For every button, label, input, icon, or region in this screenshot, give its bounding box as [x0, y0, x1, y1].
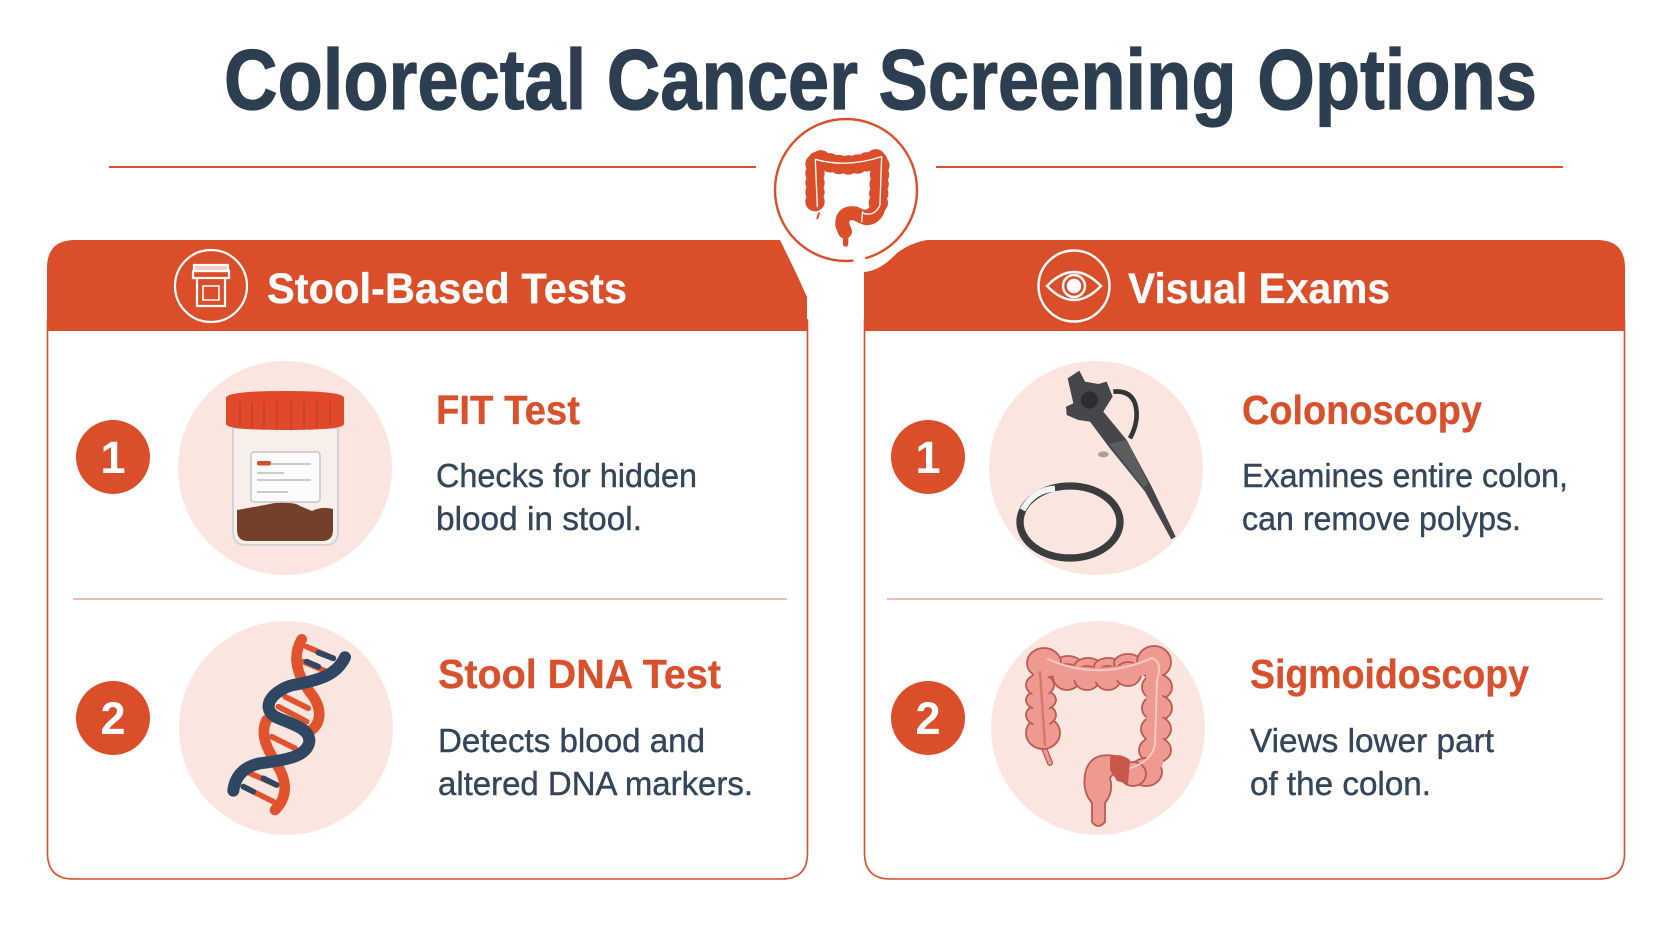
item: colonoscopy	[891, 361, 1568, 575]
illustration: specimen jar	[178, 361, 392, 575]
description: stool DNA test: Detects blood and	[438, 722, 705, 759]
number badge 1: 1	[915, 432, 941, 483]
number badge 1	[76, 420, 150, 494]
description: stool DNA test: altered DNA markers.	[438, 765, 753, 802]
panel heading: stool-based tests: Stool-Based Tests	[267, 265, 627, 313]
illustration: colonoscope	[989, 361, 1203, 575]
heading: FIT test: FIT Test	[436, 387, 580, 433]
item: stool DNA test	[76, 621, 753, 835]
description: sigmoidoscopy: of the colon.	[1250, 765, 1431, 802]
panel header: stool-based tests	[47, 240, 807, 331]
number badge 2	[891, 681, 965, 755]
heading: colonoscopy: Colonoscopy	[1242, 387, 1482, 433]
description: colonoscopy: can remove polyps.	[1242, 500, 1521, 537]
icon: colon emblem	[775, 119, 917, 261]
description: FIT test: blood in stool.	[436, 500, 642, 537]
icon: specimen cup in ring	[175, 250, 247, 322]
number badge 2: 2	[915, 693, 941, 744]
illustration: DNA helix	[179, 621, 393, 835]
panel: stool-based tests	[47, 240, 808, 879]
description: FIT test: Checks for hidden	[436, 457, 697, 494]
number badge 2: 2	[100, 693, 126, 744]
panel header: visual exams	[864, 240, 1625, 331]
item: sigmoidoscopy	[891, 621, 1529, 835]
panel: visual exams	[864, 240, 1625, 879]
description: colonoscopy	[1242, 457, 1568, 537]
number badge 1: 1	[100, 432, 126, 483]
icon: eye in ring	[1038, 250, 1110, 322]
illustration: colon anatomy	[991, 621, 1205, 835]
number badge 2	[76, 681, 150, 755]
description: FIT test	[436, 457, 697, 537]
panel heading: visual exams: Visual Exams	[1128, 265, 1390, 313]
description: colonoscopy: Examines entire colon,	[1242, 457, 1568, 494]
item: FIT test	[76, 361, 697, 575]
description: sigmoidoscopy: Views lower part	[1250, 722, 1494, 759]
number badge 1	[891, 420, 965, 494]
heading: sigmoidoscopy: Sigmoidoscopy	[1250, 651, 1529, 697]
description: sigmoidoscopy	[1250, 722, 1494, 802]
heading: stool DNA test: Stool DNA Test	[438, 651, 721, 697]
description: stool DNA test	[438, 722, 753, 802]
